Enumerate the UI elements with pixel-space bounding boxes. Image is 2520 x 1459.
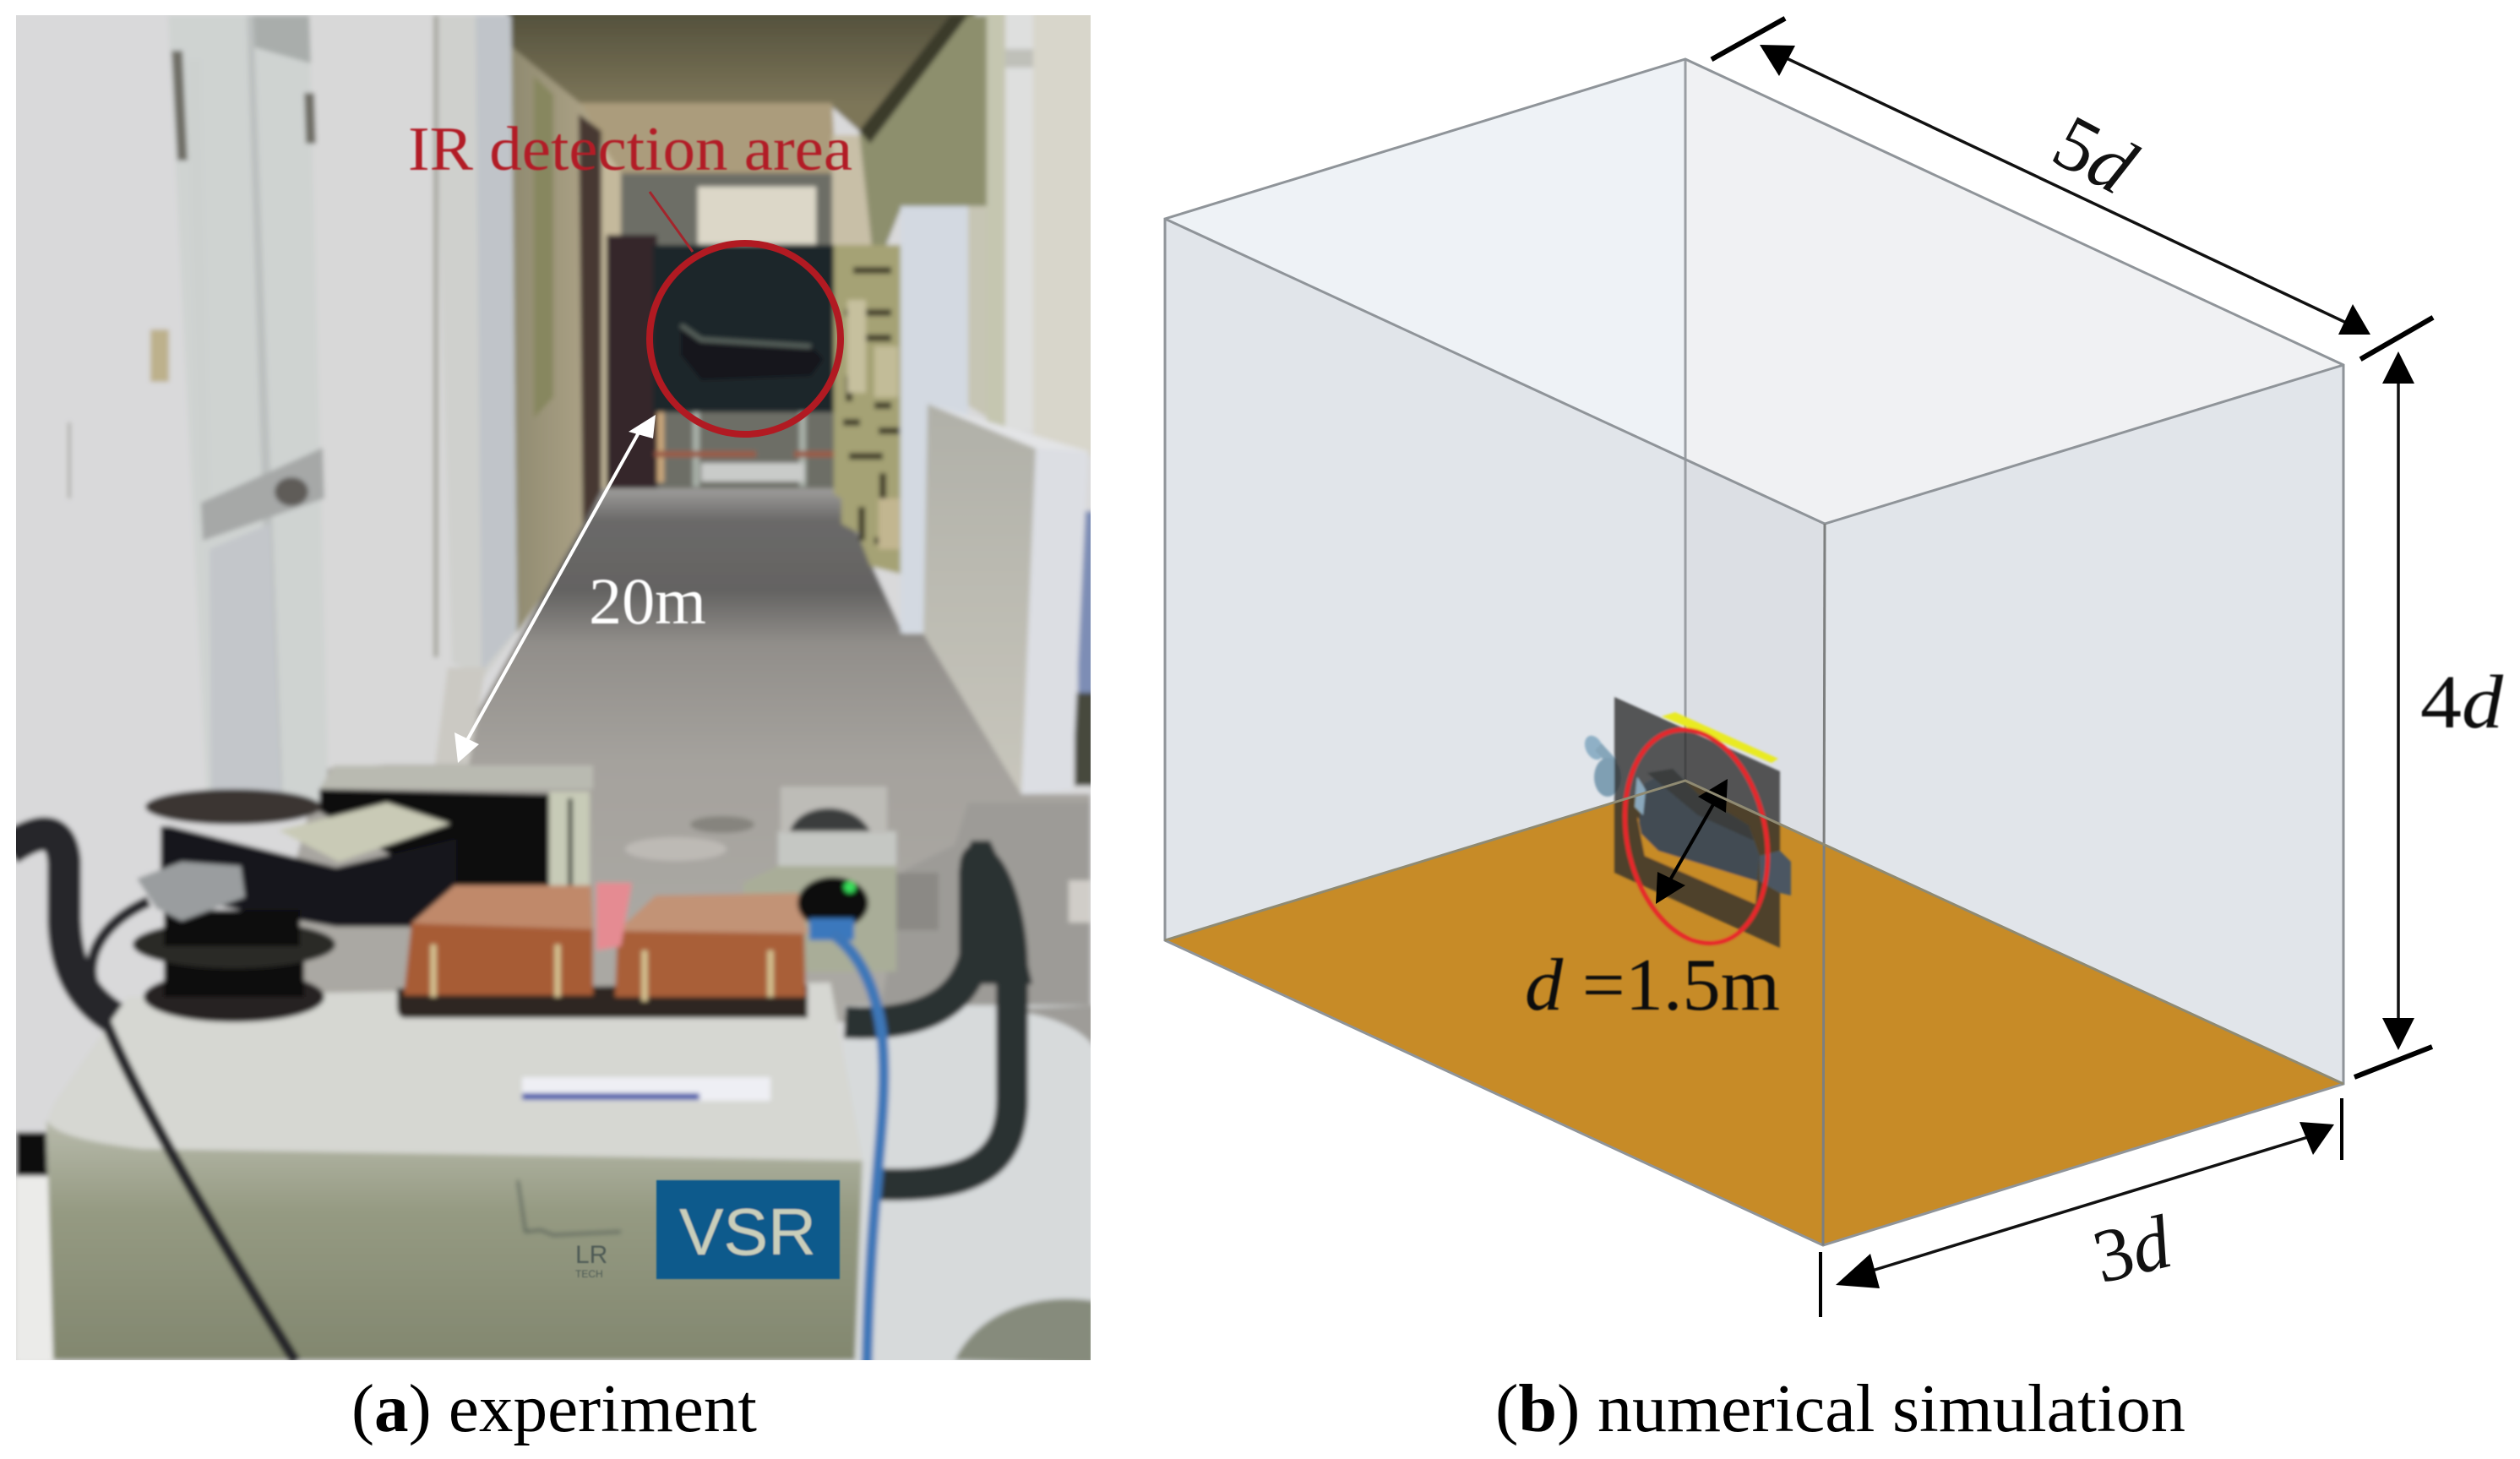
green light unit [743, 866, 896, 972]
black mount [145, 789, 321, 825]
low white wall [955, 414, 1083, 453]
far door [607, 235, 657, 488]
door [168, 15, 328, 803]
label strip [522, 1077, 770, 1101]
blue cable [832, 934, 884, 1369]
dimension: 4d: 4d [2420, 661, 2504, 744]
dimension: 3d: 3d [2085, 1200, 2180, 1299]
dimension: 5d: 5d [2040, 98, 2150, 211]
LR logo text: LR [575, 1241, 607, 1269]
main body [46, 983, 863, 1360]
yellow strip [1662, 712, 1778, 763]
panel: experiment photo [8, 8, 1098, 1369]
wall between door and pillar [326, 763, 336, 770]
stand [657, 411, 664, 482]
plate [1614, 697, 1780, 948]
arrow: 20 m distance [454, 415, 656, 763]
right corridor wall and upper [832, 135, 872, 249]
caption: (b) numerical simulation: (b) numerical simulation [1495, 1372, 2185, 1446]
tank model with plate [1581, 697, 1791, 956]
plate openings showing floor [1637, 817, 1757, 904]
VSR badge [656, 1180, 840, 1279]
caption: (a) experiment: (a) experiment [351, 1372, 757, 1446]
back vertical edge [1685, 59, 1686, 781]
LR logo text: TECH [575, 1268, 603, 1280]
scratches [68, 422, 71, 498]
tank body [1639, 769, 1760, 881]
tall white panel [901, 206, 968, 633]
blackboard target [653, 245, 852, 412]
bricks [834, 245, 903, 574]
box edges [1165, 59, 2343, 1245]
black cable [91, 901, 296, 1362]
corridor ceiling [507, 8, 980, 131]
robot [16, 1132, 50, 1176]
corridor left wall [509, 47, 590, 634]
red detection circle [650, 243, 841, 434]
far beam and back of corridor [579, 103, 836, 177]
walls [1165, 59, 2343, 1245]
label: 20m: 20m [589, 564, 706, 638]
connector [797, 877, 868, 929]
switch on wall [150, 329, 169, 382]
left handle [8, 834, 118, 1021]
sensor box [319, 765, 593, 789]
label: d = 1.5m: d =1.5m [1525, 945, 1780, 1026]
red ellipse [1606, 716, 1787, 956]
white object above target [698, 187, 816, 244]
floor [1165, 781, 2343, 1245]
double arrow: d [1656, 779, 1728, 904]
VSR badge: VSR [679, 1195, 816, 1269]
camera clip [137, 862, 245, 921]
inner back sliver [1685, 460, 1825, 845]
gun [1581, 732, 1607, 763]
leader line [650, 192, 693, 252]
door lock plate [201, 448, 324, 541]
lower door shade [210, 524, 281, 803]
top face [1165, 59, 1685, 460]
label: IR detection area: IR detection area [408, 115, 852, 184]
right handle [845, 860, 1012, 1184]
dimension: 5d [1707, 19, 2437, 359]
pipe and right wall [1033, 15, 1091, 455]
dimension: 3d [1821, 1098, 2342, 1317]
LR logo line [518, 1180, 621, 1235]
corridor floor [253, 488, 1091, 1022]
pillar [439, 16, 500, 671]
floor mottling [690, 816, 754, 833]
clothing at right edge [1078, 511, 1095, 693]
dimension: 4d [2354, 351, 2504, 1077]
copper plate [397, 984, 808, 1018]
panel: numerical simulation box [1165, 19, 2504, 1317]
